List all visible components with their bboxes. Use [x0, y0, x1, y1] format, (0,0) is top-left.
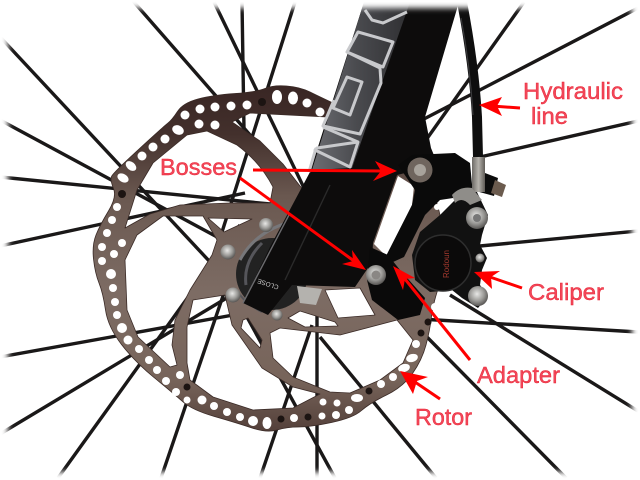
rotor disc — [93, 86, 445, 431]
caliper — [367, 153, 506, 320]
adapter lower — [367, 247, 425, 320]
caliper body — [412, 188, 488, 308]
arrow: rotor — [400, 371, 440, 399]
caliper brand text: Rodoun — [442, 250, 451, 278]
banjo fitting — [452, 188, 482, 205]
arrow: caliper — [474, 271, 522, 289]
text: CLOSE on fork: CLOSE — [256, 277, 280, 290]
rotor holes — [98, 90, 439, 429]
arrow: hydraulic line — [479, 97, 520, 116]
label: Hydraulic line: line — [531, 103, 568, 129]
rotor bolts — [220, 218, 282, 320]
fork grey graphic band — [312, 2, 410, 170]
fork dropout highlight — [243, 213, 290, 303]
label: Hydraulic line: Hydraulic — [523, 78, 623, 104]
label: Adapter: Adapter — [477, 362, 560, 388]
label: Rotor: Rotor — [415, 404, 472, 430]
fork — [243, 2, 459, 315]
hub — [236, 222, 322, 312]
boss bolts — [366, 158, 432, 285]
arrow: upper boss — [253, 161, 397, 181]
gap between fork and adapter — [374, 176, 414, 257]
arrow: lower boss — [240, 178, 366, 270]
fork lettering outlines — [309, 10, 407, 172]
hub axle — [297, 286, 322, 305]
arrow: adapter — [393, 266, 470, 360]
caliper bolts — [476, 254, 484, 262]
adapter upper arm — [385, 153, 473, 262]
caliper end nub — [491, 180, 506, 197]
ferrule — [472, 157, 485, 192]
hydraulic line — [461, 2, 478, 157]
caliper cap — [415, 235, 471, 291]
label: Bosses: Bosses — [160, 154, 237, 180]
label: Hydraulic line — [523, 78, 623, 129]
fork body — [243, 2, 459, 315]
label: Caliper: Caliper — [528, 279, 604, 305]
